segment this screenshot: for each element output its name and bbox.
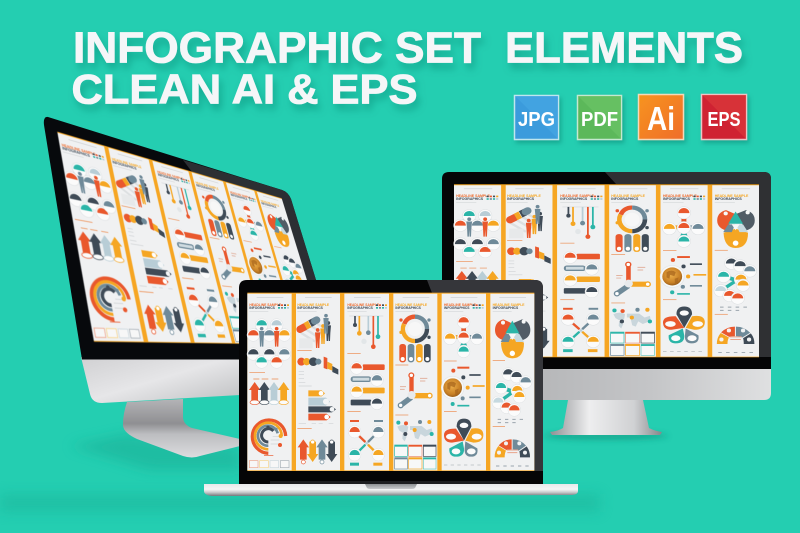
- right monitor stand: [550, 400, 662, 435]
- icon: Ai: Ai: [647, 100, 675, 137]
- column 2: cylinders and figures: [299, 314, 331, 348]
- icon: EPS: [702, 94, 746, 140]
- column 1: concentric arcs: [252, 420, 286, 455]
- left monitor bezel glare: [183, 160, 316, 280]
- format icons: [514, 94, 746, 140]
- laptop screen: poster with six infographic columns: [247, 293, 534, 471]
- icon: Ai: [638, 94, 684, 140]
- column 4: colour table: [395, 445, 436, 469]
- icon: PDF: PDF: [581, 109, 618, 131]
- column headings: HEADLINE SAMPLE: [249, 303, 282, 307]
- poster background: orange stripes: [247, 293, 534, 471]
- header small squares and rules: [249, 297, 526, 311]
- column headings: HEADLINE SAMPLE: [444, 303, 477, 307]
- icon: EPS: EPS: [708, 109, 740, 131]
- right monitor bezel: [442, 172, 771, 369]
- column 1: zigzag band: [247, 348, 291, 368]
- icon: JPG: JPG: [518, 109, 555, 131]
- icon: PDF: [578, 96, 622, 140]
- laptop notch: [365, 484, 417, 489]
- laptop lid: [239, 280, 543, 487]
- left monitor screen in perspective: [56, 131, 307, 344]
- laptop lid glare: [427, 280, 543, 471]
- column headings: INFOGRAPHICS: [395, 306, 422, 310]
- ground shadow of right monitor: [544, 432, 668, 440]
- column headings: INFOGRAPHICS: [444, 306, 470, 310]
- column 4: rounded bars: [395, 344, 431, 365]
- column 1: wave of caps and figures: [247, 319, 291, 347]
- column 3: hanging lines: [347, 316, 383, 353]
- title line 1 end: ELEMENTS: [505, 24, 743, 72]
- column headings: INFOGRAPHICS: [493, 306, 519, 310]
- column 6: semicircle arch: [495, 439, 530, 466]
- title line 1: INFOGRAPHIC SET: [73, 24, 481, 72]
- right monitor chin: [530, 366, 771, 400]
- column 2: vertical arrows: [297, 428, 337, 464]
- column 3: label bars with caps: [347, 362, 385, 412]
- left monitor stand: [123, 399, 240, 458]
- column 4: three-way diagram: [395, 373, 432, 415]
- right monitor bezel glare: [605, 172, 771, 357]
- icon: JPG: [514, 96, 558, 140]
- column 6: venn blossom: [493, 319, 530, 361]
- column headings: INFOGRAPHICS: [297, 306, 324, 310]
- column headings: HEADLINE SAMPLE: [493, 303, 525, 307]
- column headings: HEADLINE SAMPLE: [347, 303, 380, 307]
- column headings: HEADLINE SAMPLE: [297, 303, 330, 307]
- left monitor chin: [81, 355, 240, 403]
- column 6: chained caps: [492, 368, 532, 427]
- ground shadow of left monitor: [70, 434, 240, 470]
- column 5: globe with labels: [441, 368, 485, 412]
- column 5: five petals: [444, 419, 483, 465]
- title line 2: CLEAN AI & EPS: [72, 66, 418, 112]
- column headings: [249, 303, 525, 310]
- column 5: flower of caps: [444, 316, 483, 361]
- column panels: [247, 294, 534, 470]
- column headings: INFOGRAPHICS: [249, 306, 276, 310]
- laptop base: [204, 484, 578, 496]
- column 4: world map with pins: [396, 420, 434, 441]
- column 4: donut chart: [399, 317, 431, 341]
- column 2: circles and stairs: [297, 351, 338, 386]
- column 2: horizontal arrows: [299, 390, 336, 423]
- column headings: HEADLINE SAMPLE: [395, 303, 428, 307]
- title: [72, 24, 743, 112]
- right monitor screen: [454, 184, 759, 357]
- column 3: cross diagram: [348, 420, 385, 466]
- column headings: INFOGRAPHICS: [347, 306, 374, 310]
- column 1: up arrows: [249, 372, 289, 405]
- laptop hinge line: [270, 481, 510, 484]
- laptop ground shadow: [0, 494, 600, 512]
- column 1: bottom boxes: [249, 461, 289, 468]
- left monitor bezel: [44, 117, 326, 360]
